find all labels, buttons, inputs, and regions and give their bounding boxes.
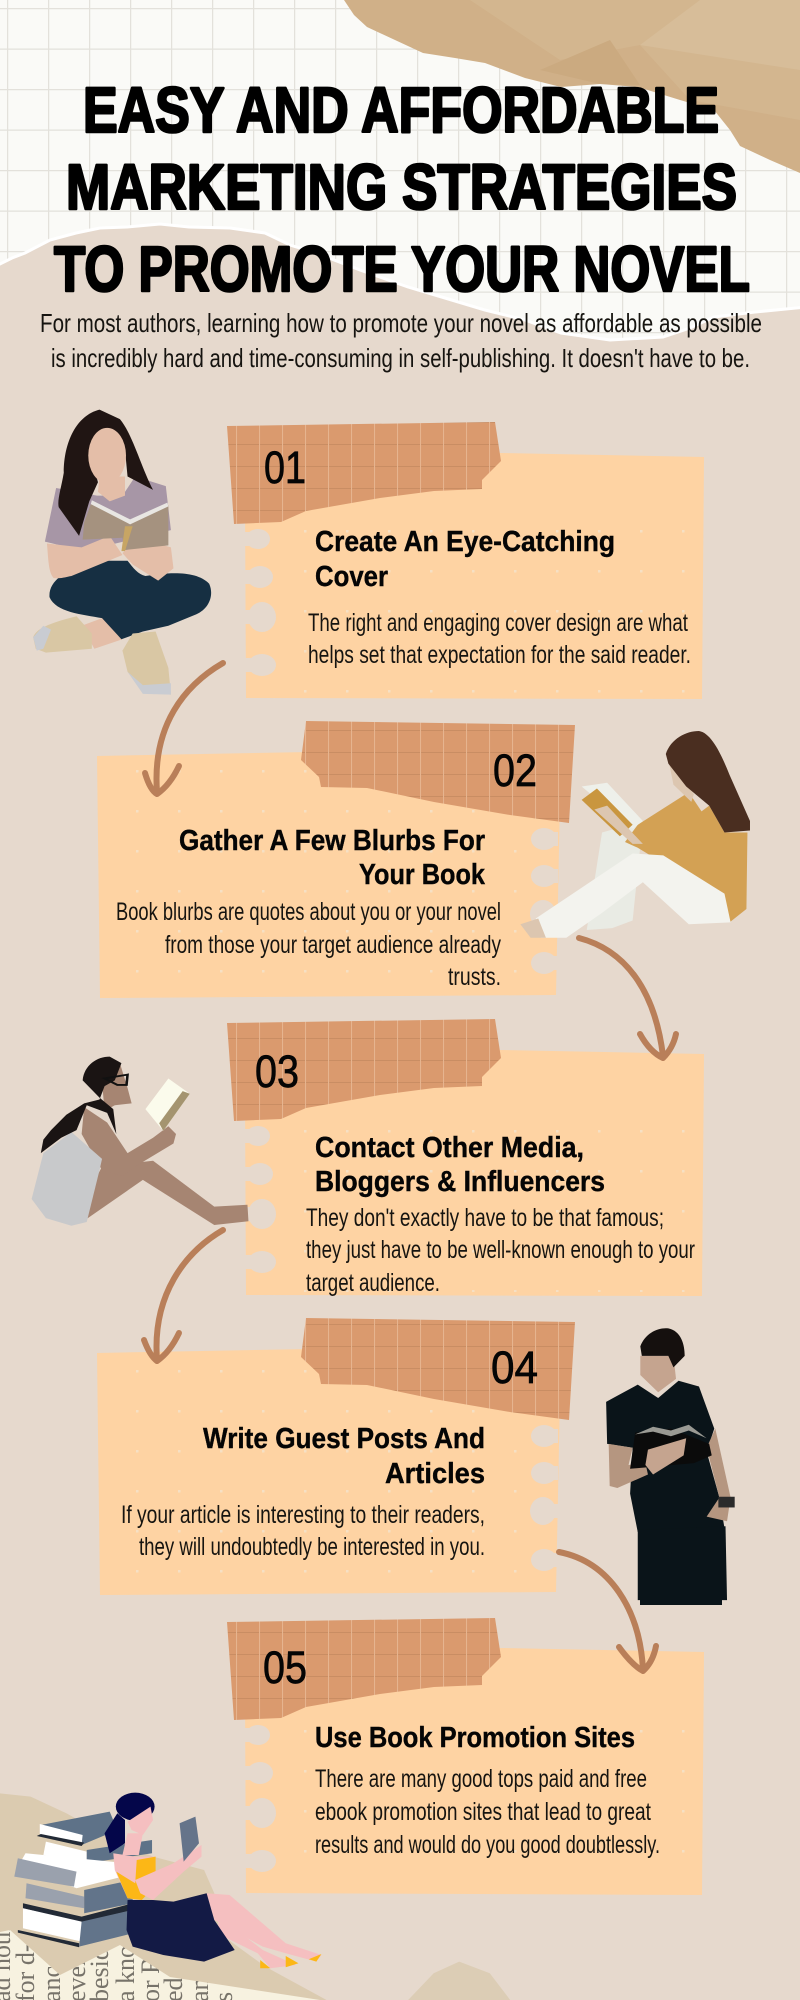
body 4: If your article is interesting to their readers, bbox=[121, 1501, 485, 1529]
number tab 04 bbox=[301, 1318, 575, 1420]
panel: step 5 bbox=[227, 1618, 704, 1895]
body 1: helps set that expectation for the said reader. bbox=[308, 641, 691, 669]
heading 5: Use Book Promotion Sites bbox=[315, 1722, 635, 1754]
body 3: They don't exactly have to be that famous; bbox=[306, 1204, 664, 1232]
panel: step 4 bbox=[97, 1318, 575, 1595]
number tab 04: 04 bbox=[491, 1342, 538, 1393]
arrow: step 3 to 4 bbox=[144, 1230, 223, 1361]
panel: step 1 bbox=[227, 422, 704, 699]
heading 1 bbox=[315, 526, 615, 593]
heading 2: Gather A Few Blurbs For bbox=[179, 825, 485, 857]
icon: woman reading, sitting cross-legged bbox=[33, 410, 211, 695]
heading 3 bbox=[315, 1132, 605, 1198]
body 5: There are many good tops paid and free bbox=[315, 1765, 647, 1793]
icon: woman reading on books bbox=[105, 1793, 321, 1968]
body 2: Book blurbs are quotes about you or your novel bbox=[116, 898, 501, 926]
body 4 bbox=[121, 1501, 485, 1561]
heading 4: Write Guest Posts And bbox=[203, 1423, 485, 1455]
number tab 05 bbox=[227, 1618, 501, 1720]
torn brown paper bbox=[344, 0, 800, 173]
torn paper bottom left bbox=[0, 1793, 510, 2000]
title bbox=[54, 74, 750, 305]
intro text bbox=[40, 308, 762, 373]
body 1 bbox=[308, 609, 691, 669]
number tab 03 bbox=[227, 1019, 501, 1121]
body 3 bbox=[306, 1204, 695, 1297]
panel: step 3 bbox=[227, 1019, 704, 1297]
icon: woman in yellow sweater reading bbox=[520, 731, 750, 938]
icon: man reading bbox=[606, 1328, 735, 1600]
heading 2 bbox=[179, 825, 486, 891]
number tab 01: 01 bbox=[264, 442, 306, 493]
newspaper scrap bbox=[0, 1930, 320, 2000]
number tab 02: 02 bbox=[493, 745, 537, 796]
heading 3: Contact Other Media, bbox=[315, 1132, 584, 1164]
body 5: ebook promotion sites that lead to great bbox=[315, 1798, 651, 1826]
body 5 bbox=[315, 1765, 660, 1859]
body 2 bbox=[116, 898, 501, 991]
panel: grid paper header bbox=[0, 0, 800, 345]
heading 4 bbox=[203, 1423, 485, 1490]
newspaper scrap: besides bbox=[85, 1925, 114, 2000]
number tab 02 bbox=[301, 721, 575, 823]
body 2: trusts. bbox=[448, 963, 501, 991]
arrow: step 4 to 5 bbox=[559, 1552, 656, 1671]
body 3: target audience. bbox=[306, 1269, 440, 1297]
body 4: they will undoubtedly be interested in you. bbox=[139, 1533, 485, 1561]
number tab 03: 03 bbox=[255, 1046, 299, 1097]
number tab 05: 05 bbox=[263, 1642, 307, 1693]
body 5: results and would do you good doubtlessly. bbox=[315, 1831, 660, 1859]
heading 2: Your Book bbox=[359, 859, 486, 891]
arrow: step 1 to 2 bbox=[145, 663, 223, 794]
icon: stack of books bbox=[14, 1812, 152, 1947]
icon: man's trousers lower bbox=[640, 1595, 722, 1605]
heading 3: Bloggers & Influencers bbox=[315, 1166, 605, 1198]
number tab 01 bbox=[227, 422, 501, 524]
arrow: step 2 to 3 bbox=[579, 938, 676, 1058]
heading 1: Cover bbox=[315, 561, 388, 593]
heading 1: Create An Eye-Catching bbox=[315, 526, 615, 558]
icon: woman with glasses reading bbox=[32, 1057, 248, 1226]
panel: step 2 bbox=[97, 721, 575, 998]
body 2: from those your target audience already bbox=[165, 931, 501, 959]
heading 4: Articles bbox=[385, 1458, 485, 1490]
